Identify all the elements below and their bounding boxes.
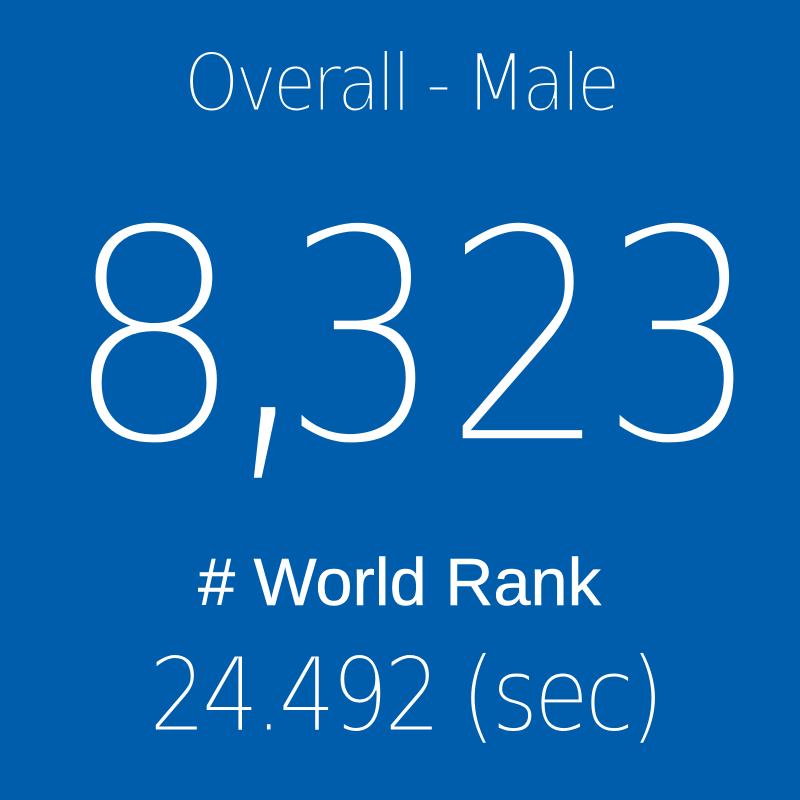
big number: 3 bbox=[599, 167, 762, 510]
label: world rank: # World Rank bbox=[198, 545, 601, 620]
big number: 8 bbox=[62, 166, 246, 510]
big number bbox=[62, 42, 762, 530]
big number: 2 bbox=[443, 166, 610, 510]
title: Overall - Male bbox=[184, 39, 616, 129]
big number: , bbox=[210, 42, 326, 530]
value: time in seconds: 24.492 (sec) bbox=[149, 636, 660, 754]
big number: 3 bbox=[280, 167, 444, 510]
